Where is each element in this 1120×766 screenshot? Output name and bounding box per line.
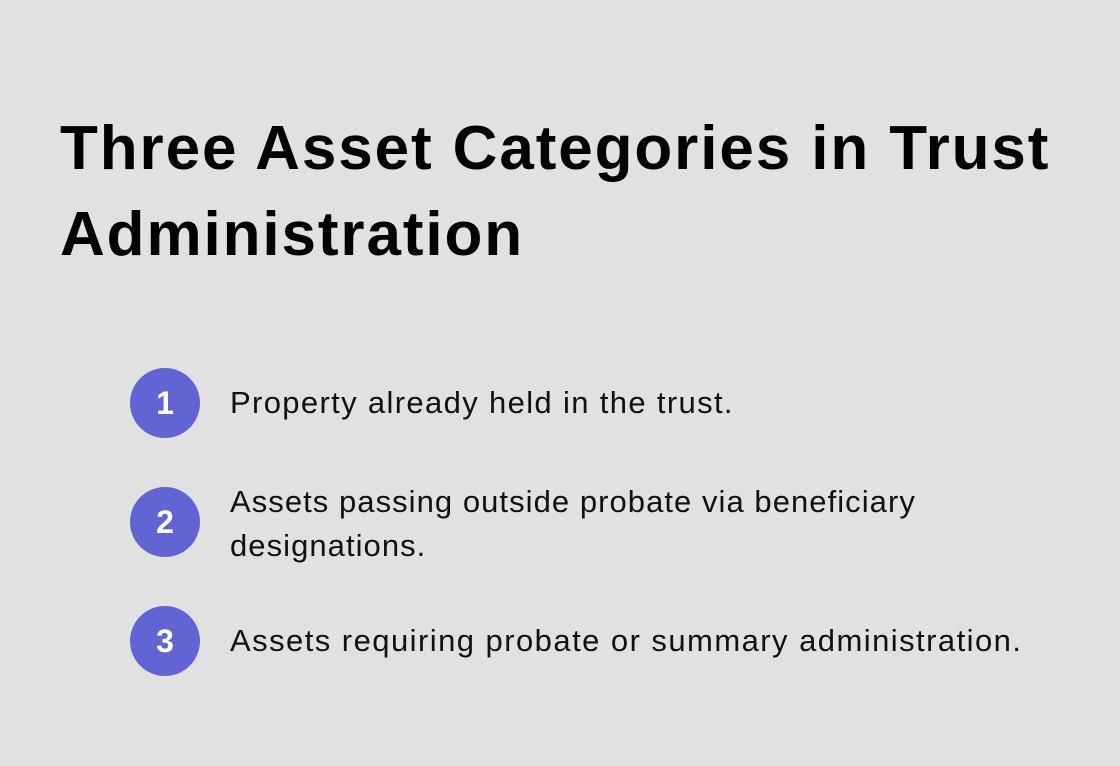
title — [60, 114, 1050, 269]
badge 3 — [130, 606, 200, 676]
badge 1 — [130, 368, 200, 438]
text 2: Assets passing outside probate via beneficiary — [230, 484, 916, 519]
badge 1: 1 — [156, 385, 174, 421]
item 3 — [130, 606, 1022, 676]
item 2 — [130, 484, 916, 563]
title: Three Asset Categories in Trust — [60, 114, 1050, 183]
text 2: designations. — [230, 528, 426, 563]
title: Administration — [60, 200, 524, 269]
text 1: Property already held in the trust. — [230, 385, 734, 420]
badge 2: 2 — [156, 504, 174, 540]
text 3: Assets requiring probate or summary administration. — [230, 623, 1022, 658]
badge 2 — [130, 487, 200, 557]
item 1 — [130, 368, 734, 438]
text 2 — [230, 484, 916, 563]
badge 3: 3 — [156, 623, 174, 659]
